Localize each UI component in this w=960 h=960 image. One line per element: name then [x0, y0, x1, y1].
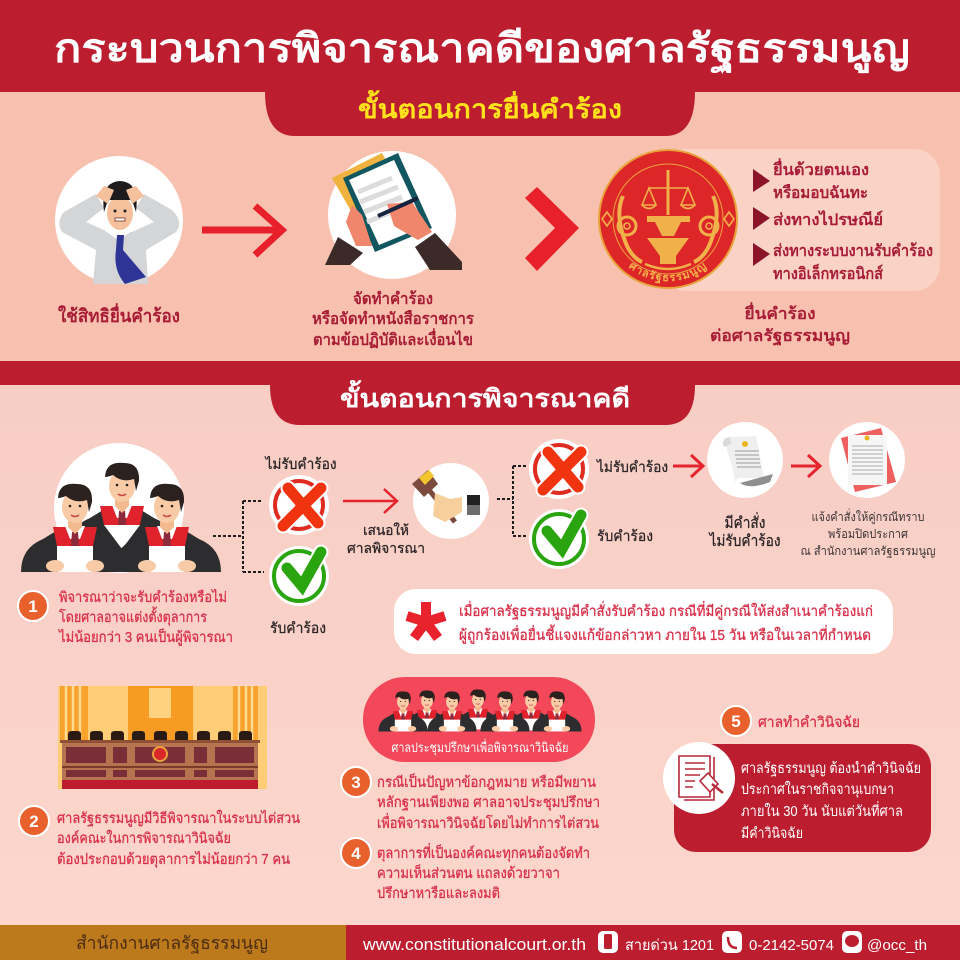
- text: step 4: [377, 843, 590, 902]
- label: prepare petition: [312, 290, 474, 349]
- connector: second decision: [497, 466, 528, 536]
- bullet: electronic: ส่งทางระบบงานรับคำร้อง: [773, 242, 933, 260]
- text: step 5: ประกาศในราชกิจจานุเบกษา: [741, 780, 894, 798]
- icon: green check: [529, 509, 589, 569]
- text: step 3: กรณีเป็นปัญหาข้อกฎหมาย หรือมีพยาน: [377, 772, 596, 791]
- footer: phone number: 0-2142-5074: [749, 937, 834, 954]
- footer: [0, 925, 960, 960]
- footer: website: www.constitutionalcourt.or.th: [362, 935, 586, 954]
- label: refer to court: ศาลพิจารณา: [347, 540, 425, 556]
- badge 4: 4: [351, 844, 361, 863]
- label: file with the court: [710, 302, 850, 347]
- label: prepare petition: ตามข้อปฏิบัติและเงื่อนไข: [313, 328, 473, 349]
- text: step 5: [741, 760, 921, 842]
- arrow: [343, 489, 397, 513]
- callout: [394, 589, 893, 654]
- icon: LINE: [842, 931, 862, 953]
- label: court delivers ruling: ศาลทำคำวินิจฉัย: [758, 715, 860, 731]
- text: step 4: ความเห็นส่วนตน แถลงด้วยวาจา: [377, 863, 560, 882]
- chevron arrow: [525, 187, 579, 271]
- text: callout: [459, 601, 873, 644]
- step: prepare petition icon: [325, 151, 462, 279]
- step 1: [18, 588, 233, 646]
- badge 3: [341, 767, 371, 797]
- text: step 2: ต้องประกอบด้วยตุลาการไม่น้อยกว่า 7 คน: [57, 850, 290, 868]
- text: step 4: ปรึกษาหารือและลงมติ: [377, 885, 500, 902]
- text: step 5: ศาลรัฐธรรมนูญ ต้องนำคำวินิจฉัย: [741, 760, 921, 777]
- label: order not accepted: มีคำสั่ง: [724, 512, 766, 532]
- label: prepare petition: จัดทำคำร้อง: [353, 290, 433, 308]
- label: prepare petition: หรือจัดทำหนังสือราชการ: [312, 310, 474, 328]
- text: step 2: ศาลรัฐธรรมนูญมีวิธีพิจารณาในระบบไต่สวน: [57, 809, 300, 827]
- bullet: electronic: ทางอิเล็กทรอนิกส์: [773, 262, 883, 283]
- icon: red cross: [269, 475, 329, 535]
- step 5 heading: [721, 706, 860, 736]
- label: accepted: รับคำร้อง: [597, 528, 653, 545]
- label: not accepted: ไม่รับคำร้อง: [265, 455, 336, 473]
- icon: notice documents: [829, 422, 905, 498]
- arrow: [673, 455, 703, 477]
- footer: office name: สำนักงานศาลรัฐธรรมนูญ: [76, 933, 268, 954]
- badge 4: [341, 838, 371, 868]
- icon: red cross: [529, 439, 589, 499]
- label: not accepted: ไม่รับคำร้อง: [596, 458, 668, 476]
- text: step 2: [57, 809, 300, 868]
- text: step 3: เพื่อพิจารณาวินิจฉัยโดยไม่ทำการไต่สวน: [377, 813, 599, 832]
- text: step 4: ตุลาการที่เป็นองค์คณะทุกคนต้องจัดทำ: [377, 843, 590, 862]
- step 2: [19, 806, 300, 868]
- label: accepted: รับคำร้อง: [270, 620, 326, 637]
- trial section band: [0, 361, 960, 425]
- label: notify parties: [800, 508, 936, 559]
- text: step 5: ภายใน 30 วัน นับแต่วันที่ศาล: [741, 801, 903, 820]
- illustration: courtroom: [58, 686, 267, 789]
- icon: gavel: [412, 463, 489, 539]
- text: step 3: [377, 772, 600, 832]
- panel: court conference: [363, 677, 595, 762]
- icon: mobile phone: [598, 931, 618, 953]
- badge 2: 2: [29, 812, 39, 831]
- illustration: three judges: [21, 443, 221, 573]
- panel: filing channels: [660, 149, 940, 291]
- label: refer to court: เสนอให้: [363, 522, 409, 538]
- header band: [0, 0, 960, 136]
- label: order not accepted: ไม่รับคำร้อง: [708, 532, 780, 550]
- connector: first decision: [213, 501, 264, 572]
- text: callout: เมื่อศาลรัฐธรรมนูญมีคำสั่งรับคำร้อง กรณีที่มีคู่กรณีให้ส่งสำเนาคำร้องแก่: [459, 601, 873, 620]
- bullet: post: ส่งทางไปรษณีย์: [773, 210, 883, 229]
- panel: step 5: [663, 742, 931, 852]
- label: notify parties: พร้อมปิดประกาศ: [828, 527, 908, 541]
- label: file with the court: ต่อศาลรัฐธรรมนูญ: [710, 327, 850, 347]
- label: notify parties: ณ สำนักงานศาลรัฐธรรมนูญ: [800, 544, 936, 559]
- step: exercise right icon: [55, 156, 183, 284]
- icon: telephone: [722, 931, 742, 953]
- icon: asterisk: [407, 602, 445, 638]
- bullet: in person: ยื่นด้วยตนเอง: [772, 158, 869, 179]
- label: order not accepted: [708, 512, 780, 550]
- label: conference: ศาลประชุมปรึกษาเพื่อพิจารณาวินิจฉัย: [392, 739, 568, 756]
- label: exercise right: ใช้สิทธิยื่นคำร้อง: [58, 303, 180, 326]
- text: step 2: องค์คณะในการพิจารณาวินิจฉัย: [57, 829, 231, 847]
- bullet: in person: [753, 158, 869, 202]
- footer: LINE handle: @occ_th: [867, 937, 927, 954]
- text: step 3: หลักฐานเพียงพอ ศาลอาจประชุมปรึกษา: [377, 794, 600, 811]
- icon: order scroll: [707, 422, 783, 498]
- text: step 1: โดยศาลอาจแต่งตั้งตุลาการ: [59, 606, 207, 626]
- text: step 1: ไม่น้อยกว่า 3 คนเป็นผู้พิจารณา: [58, 627, 233, 646]
- text: step 1: [58, 588, 233, 646]
- footer: hotline: สายด่วน 1201: [625, 937, 714, 954]
- label: notify parties: แจ้งคำสั่งให้คู่กรณีทราบ: [812, 508, 924, 525]
- icon: green check: [269, 546, 329, 606]
- emblem: constitutional court seal: ศาลรัฐธรรมนูญ: [628, 263, 708, 284]
- step 3: [341, 767, 600, 832]
- bullet: in person: หรือมอบฉันทะ: [773, 184, 868, 202]
- icon: ruling document and gavel: [663, 742, 735, 814]
- section background: filing steps: [0, 92, 960, 362]
- badge 2: [19, 806, 49, 836]
- bullet: post: [753, 207, 883, 230]
- step 4: [341, 838, 590, 902]
- arrow: [791, 455, 820, 477]
- text: step 5: มีคำวินิจฉัย: [741, 825, 803, 842]
- arrow: [202, 206, 282, 255]
- title: กระบวนการพิจารณาคดีของศาลรัฐธรรมนูญ: [54, 27, 910, 75]
- bullet: electronic: [753, 242, 933, 283]
- text: step 1: พิจารณาว่าจะรับคำร้องหรือไม่: [59, 588, 227, 606]
- badge 3: 3: [351, 773, 361, 792]
- heading: trial steps: ขั้นตอนการพิจารณาคดี: [340, 379, 630, 413]
- badge 1: 1: [28, 597, 38, 616]
- badge 1: [18, 591, 48, 621]
- heading: filing steps: ขั้นตอนการยื่นคำร้อง: [358, 89, 622, 124]
- label: refer to court: [347, 522, 425, 556]
- emblem: constitutional court seal: [598, 149, 738, 289]
- label: file with the court: ยื่นคำร้อง: [744, 302, 816, 323]
- text: callout: ผู้ถูกร้องเพื่อยื่นชี้แจงแก้ข้อกล่าวหา ภายใน 15 วัน หรือในเวลาที่กำหนด: [459, 624, 871, 644]
- judges row: [378, 689, 582, 731]
- section background: trial steps: [0, 380, 960, 926]
- badge 5: 5: [731, 712, 741, 731]
